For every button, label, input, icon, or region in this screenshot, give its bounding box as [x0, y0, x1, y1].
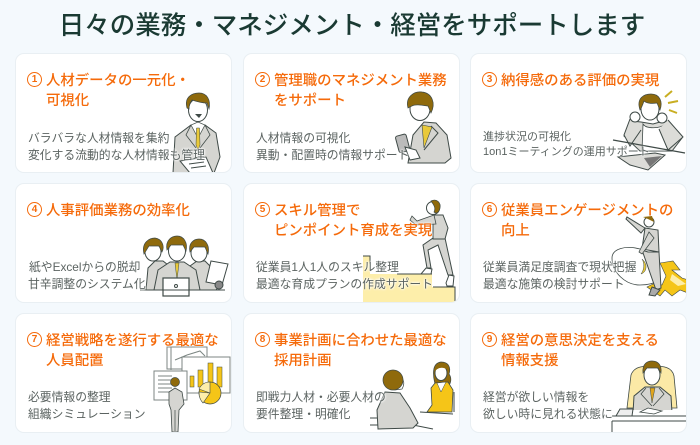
heading: 情報支援 [501, 353, 559, 369]
heading: 経営戦略を遂行する最適な [46, 333, 219, 349]
icon: man climbing stairs [363, 200, 456, 302]
heading: 従業員エンゲージメントの [501, 203, 673, 219]
heading: 事業計画に合わせた最適な [274, 333, 447, 349]
icon: man with smartphone [395, 92, 452, 164]
panel: card 6 engagement [470, 183, 687, 303]
number badge [482, 72, 497, 87]
icon: executive at desk [612, 360, 686, 432]
body text: 要件整理・明確化 [256, 406, 350, 420]
heading [274, 202, 434, 239]
number badge: 7 [32, 334, 37, 345]
heading [274, 332, 447, 369]
body text [483, 130, 650, 158]
body text: 進捗状況の可視化 [483, 131, 571, 143]
body text [28, 390, 146, 420]
panel: card 9 executive decisions [470, 313, 687, 433]
number badge: 9 [487, 334, 492, 345]
heading: 管理職のマネジメント業務 [274, 73, 447, 89]
body text: 甘辛調整のシステム化 [28, 276, 146, 290]
icon: interview scene [370, 362, 454, 430]
number badge [255, 332, 270, 347]
heading: 納得感のある評価の実現 [501, 73, 659, 89]
heading: 人員配置 [46, 353, 104, 369]
body text: 組織シミュレーション [28, 406, 146, 420]
body text [28, 131, 206, 162]
body text [28, 260, 147, 290]
number badge [482, 202, 497, 217]
body text: 最適な育成プランの作成サポート [256, 276, 433, 290]
body text: 最適な施策の検討サポート [483, 276, 625, 290]
icon: man spotlighted with lightning [612, 216, 686, 296]
number badge [27, 202, 42, 217]
body text: バラバラな人材情報を集約 [28, 131, 169, 145]
heading: 採用計画 [274, 353, 332, 369]
panel: card 3 fair evaluation [470, 53, 687, 173]
number badge: 5 [260, 204, 265, 215]
icon: man viewing charts [154, 346, 230, 432]
body text: 紙やExcelからの脱却 [29, 260, 140, 274]
heading: をサポート [274, 93, 346, 109]
body text: 必要情報の整理 [28, 390, 111, 404]
heading [501, 332, 659, 369]
heading: スキル管理で [274, 203, 360, 219]
number badge [482, 332, 497, 347]
number badge: 1 [32, 74, 37, 85]
number badge: 8 [260, 334, 265, 345]
heading: 人材データの一元化・ [46, 73, 190, 89]
number badge: 2 [260, 74, 265, 85]
heading [274, 72, 447, 109]
panel: card 4 HR efficiency [15, 183, 232, 303]
panel: card 5 skill management [243, 183, 460, 303]
body text: 欲しい時に見れる状態に [483, 406, 613, 420]
number badge [27, 332, 42, 347]
body text: 1on1ミーティングの運用サポート [483, 146, 650, 158]
number badge: 4 [32, 204, 37, 215]
icon: three men at laptop [140, 236, 229, 297]
number badge [27, 72, 42, 87]
body text [256, 390, 386, 420]
panel: card 1 data unification [15, 53, 232, 173]
panel: card 8 recruitment planning [243, 313, 460, 433]
heading: 可視化 [46, 93, 89, 109]
number badge: 3 [487, 74, 492, 85]
body text [256, 131, 409, 162]
body text: 人材情報の可視化 [256, 131, 350, 145]
number badge [255, 72, 270, 87]
body text: 異動・配置時の情報サポート [256, 148, 409, 162]
heading [46, 332, 219, 369]
body text: 変化する流動的な人材情報も管理 [28, 148, 205, 162]
title: 日々の業務・マネジメント・経営をサポートします [59, 12, 645, 40]
body text: 経営が欲しい情報を [483, 390, 589, 404]
body text [256, 260, 433, 291]
panel: card 7 strategy staffing [15, 313, 232, 433]
body text: 即戦力人材・必要人材の [256, 390, 386, 404]
number badge: 6 [487, 204, 492, 215]
heading [46, 72, 190, 109]
icon: man holding papers [172, 92, 220, 172]
body text: 従業員1人1人のスキル整理 [256, 260, 399, 274]
heading: 経営の意思決定を支える [501, 333, 659, 349]
heading [501, 202, 673, 239]
icon: man cheering with laptop [612, 90, 686, 170]
number badge [255, 202, 270, 217]
heading: 人事評価業務の効率化 [46, 203, 190, 219]
body text [483, 260, 636, 290]
panel: card 2 manager support [243, 53, 460, 173]
body text: 従業員満足度調査で現状把握 [483, 260, 636, 274]
heading: ピンポイント育成を実現 [274, 223, 432, 239]
body text [483, 390, 614, 420]
heading: 向上 [501, 223, 530, 239]
